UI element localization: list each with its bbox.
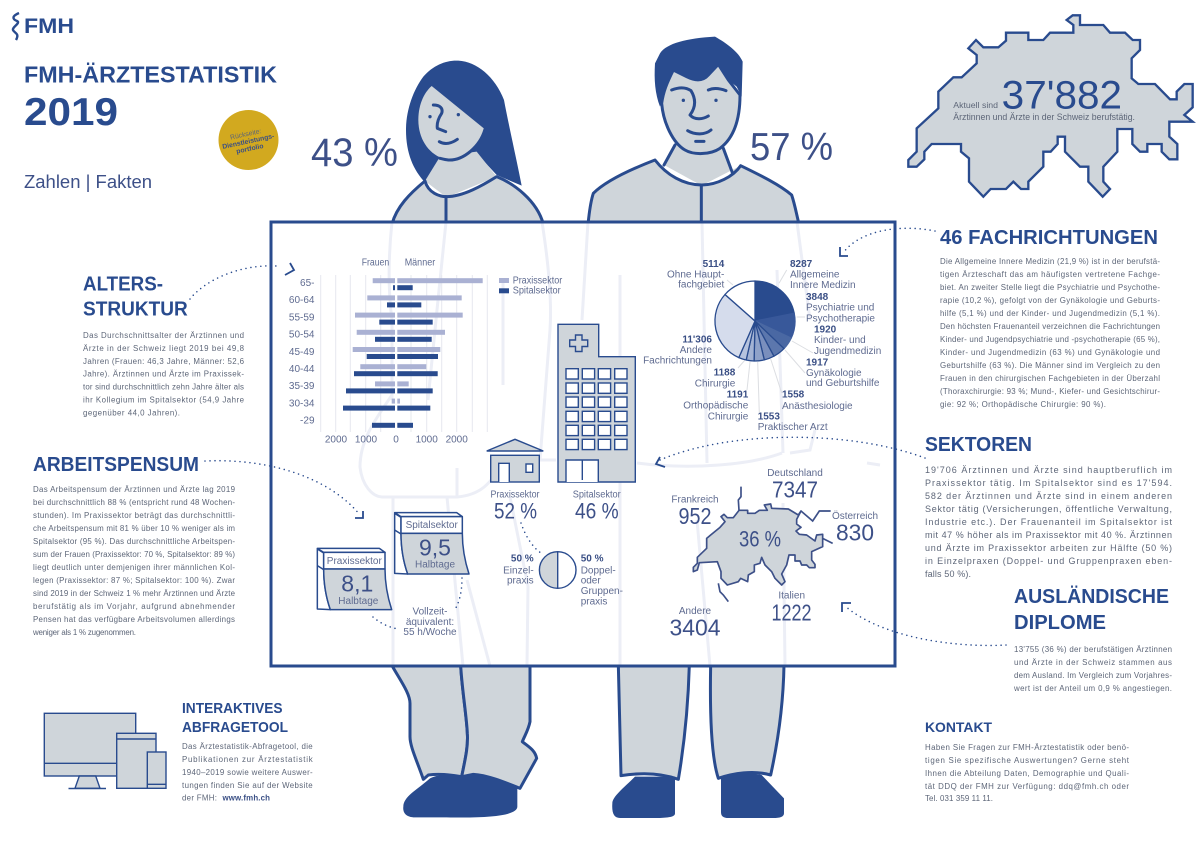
arrow: Fachrichtungen to pie	[840, 228, 935, 256]
section: Arbeitspensum: bei durchschnittlich 88 % (entspricht rund 48 Wochen-	[33, 498, 235, 507]
section: Ausländische Diplome: DIPLOME	[1014, 612, 1106, 634]
label: Spitalsektor 46 %	[573, 489, 621, 524]
section: Sektoren: und Ärzte im Praxissektor arbeiten zur Hälfte (50 %)	[925, 543, 1172, 553]
section: Ausländische Diplome: 13'755 (36 %) der berufstätigen Ärztinnen	[1014, 645, 1172, 654]
bar chart: age structure: 60-64	[289, 295, 315, 306]
bar chart: age structure: 45-49	[289, 347, 315, 358]
pie chart: specialties: Ohne Haupt-	[667, 270, 724, 280]
map: foreign diplomas: Italien	[778, 590, 805, 601]
section: Ausländische Diplome: dem Ausland. Im Vergleich zum Vorjahres-	[1014, 671, 1172, 680]
callout: Vollzeitäquivalent: äquivalent:	[406, 617, 454, 628]
pie chart: specialties: Jugendmedizin	[814, 346, 881, 357]
icon: practice house	[487, 439, 543, 482]
bar chart: age structure: Spitalsektor	[513, 286, 561, 296]
arrow: Arbeitspensum to calendars	[205, 461, 363, 518]
pie chart: specialties: Chirurgie	[695, 378, 736, 390]
section: 46 Fachrichtungen: Die Allgemeine Innere Medizin (21,9 %) ist in der berufstä-	[940, 257, 1160, 266]
bar chart: age structure: 55-59	[289, 312, 315, 323]
calendar: Praxissektor: Praxissektor	[327, 556, 382, 567]
section: Altersstruktur: Das Durchschnittsalter der Ärztinnen und	[83, 331, 244, 340]
section: Sektoren: Industrie etc.). Der Frauenanteil im Spitalsektor ist	[925, 517, 1172, 527]
pie chart: specialties: fachgebiet	[678, 280, 725, 291]
pie chart: specialties: 5114	[703, 259, 725, 270]
section: Interaktives Abfragetool	[182, 700, 313, 802]
figure: woman upper body	[392, 61, 543, 224]
pie chart: specialties: 1920	[814, 325, 837, 336]
label: Spitalsektor 46 %: 46 %	[575, 498, 619, 524]
section: Arbeitspensum	[32, 454, 236, 637]
badge: Rückseite: Dienstleistungs-	[222, 133, 275, 151]
calendar: Spitalsektor	[395, 513, 469, 574]
pie chart: specialties: 3848	[806, 292, 829, 303]
section: Ausländische Diplome	[1013, 585, 1172, 693]
section: Interaktives Abfragetool: ABFRAGETOOL	[182, 719, 288, 736]
map: Switzerland total: 37'882	[1002, 73, 1122, 117]
section: Interaktives Abfragetool: tungen finden Sie auf der Website	[182, 781, 313, 790]
section: Altersstruktur: Jahren (Frauen: 46,3 Jahre, Männer: 52,6	[83, 357, 245, 366]
bar chart: age structure: 30-34	[289, 398, 315, 409]
logo: FMH	[13, 13, 74, 40]
bar chart: age structure: 50-54	[289, 330, 315, 341]
pie chart: specialties: Gynäkologie	[806, 368, 862, 379]
subtitle: Zahlen | Fakten	[24, 172, 152, 192]
chart: practice split: 50 %	[511, 553, 534, 564]
label: Praxissektor 52 %: Praxissektor	[490, 489, 540, 500]
section: 46 Fachrichtungen: gie: 92 %; Orthopädische Chirurgie: 90 %).	[940, 400, 1106, 409]
bar chart: age structure: Praxissektor	[513, 276, 563, 286]
section: Arbeitspensum: berufstätig als im Vorjahr, aufgrund abnehmender	[33, 602, 235, 611]
map: foreign diplomas: 36 %	[739, 527, 781, 552]
section: Kontakt: tät DDQ der FMH zur Verfügung: ddq@fmh.ch oder	[925, 782, 1129, 791]
section: Kontakt: Haben Sie Fragen zur FMH-Ärztestatistik oder benö-	[925, 743, 1129, 752]
badge: Rückseite: portfolio	[236, 143, 264, 156]
section: Arbeitspensum: Spitalsektor (95 %). Das durchschnittliche Arbeitspen-	[33, 537, 235, 546]
figure: man legs and shoes	[612, 665, 784, 818]
bar chart: age structure	[289, 258, 563, 446]
section: 46 Fachrichtungen: Kinder- und Jugendmedizin (63 %) und Gynäkologie und	[940, 348, 1160, 357]
callout: Vollzeitäquivalent	[373, 578, 462, 638]
section: Kontakt: Tel. 031 359 11 11.	[925, 794, 993, 803]
icon: devices	[44, 713, 166, 788]
map: foreign diplomas: Frankreich	[671, 495, 719, 506]
map: foreign diplomas: Deutschland	[767, 468, 823, 479]
pie chart: specialties: 11'306	[682, 334, 712, 345]
logo: FMH: FMH	[24, 15, 74, 38]
section: Kontakt: tigen Sie spezifische Auswertungen? Gerne steht	[925, 756, 1130, 765]
pie chart: specialties: 8287	[790, 259, 813, 270]
calendar: Praxissektor: 8,1	[341, 571, 373, 597]
panel: central board	[271, 222, 895, 666]
calendar: Spitalsektor: Spitalsektor	[406, 520, 458, 531]
section: Kontakt	[925, 719, 1130, 803]
bar chart: age structure: 65-	[300, 278, 314, 289]
chart: practice split: oder	[581, 576, 601, 587]
section: Interaktives Abfragetool: der FMH:	[182, 794, 217, 802]
section: Sektoren: falls 50 %).	[925, 569, 971, 579]
pie chart: specialties: 1558	[782, 390, 805, 401]
section: Arbeitspensum: sum der Frauen (Praxissektor: 70 %, Spitalsektor: 89 %)	[33, 550, 235, 559]
section: 46 Fachrichtungen: biet. An zweiter Stelle liegt die Psychiatrie und Psychothe-	[940, 283, 1160, 292]
section: Interaktives Abfragetool: Publikationen zur Ärztestatistik	[182, 755, 313, 764]
chart: practice split: 50 %	[581, 553, 604, 564]
title: 2019	[24, 91, 118, 134]
section: Arbeitspensum: che Arbeitspensum mit 81 % über 10 % weniger als im	[33, 524, 235, 533]
map: foreign diplomas: 1222	[772, 600, 812, 626]
calendar: Praxissektor: Halbtage	[338, 596, 379, 607]
section: Interaktives Abfragetool: INTERAKTIVES	[182, 700, 282, 717]
chart: practice split: Einzel-	[503, 566, 534, 576]
bar chart: age structure: 0	[393, 435, 399, 446]
chart: practice split: Doppel-	[581, 566, 616, 576]
section: Arbeitspensum: Pensen hat das verfügbare Arbeitsvolumen allerdings	[33, 615, 235, 624]
calendar: Spitalsektor: 9,5	[419, 534, 451, 560]
section: Altersstruktur: STRUKTUR	[83, 299, 188, 321]
section: Altersstruktur: ALTERS-	[83, 274, 163, 296]
pie chart: specialties: 1191	[727, 390, 749, 401]
statistic: 43 % women: 43 %	[311, 131, 398, 175]
statistic: 57 % men: 57 %	[750, 126, 833, 169]
map: Switzerland total	[908, 15, 1193, 197]
section: Sektoren: 19'706 Ärztinnen und Ärzte sind hauptberuflich im	[925, 465, 1172, 475]
section: 46 Fachrichtungen: hilfe (5,1 %) und der Kinder- und Jugendmedizin (5,1 %).	[940, 309, 1160, 318]
section: Ausländische Diplome: AUSLÄNDISCHE	[1014, 585, 1169, 608]
pie chart: specialties: Allgemeine	[790, 270, 840, 280]
bar chart: age structure: 40-44	[289, 364, 315, 375]
arrow: Sektoren to buildings	[656, 437, 925, 467]
icon: hospital	[558, 324, 635, 482]
section: 46 Fachrichtungen: (Thoraxchirurgie: 93 %; Mund-, Kiefer- und Gesichtschirur-	[940, 387, 1160, 396]
section: 46 Fachrichtungen: rapie (10,2 %), gefolgt von der Gynäkologie und Geburts-	[940, 296, 1160, 305]
section: Altersstruktur: ihr Kollegium im Spitalsektor (54,9 Jahre	[83, 396, 245, 404]
section: Altersstruktur: Jahre). Ärztinnen und Ärzte im Praxissek-	[83, 370, 244, 379]
section: Ausländische Diplome: und Ärzte in der Schweiz stammen aus	[1014, 658, 1172, 667]
badge: Rückseite: Rückseite:	[230, 128, 262, 142]
section: Arbeitspensum: sind 2019 in der Schweiz 1 % mehr Ärztinnen und Ärzte	[33, 589, 236, 598]
callout: Vollzeitäquivalent: Vollzeit-	[412, 606, 448, 618]
bar chart: age structure: 1000	[416, 435, 438, 446]
section: 46 Fachrichtungen: 46 FACHRICHTUNGEN	[940, 227, 1158, 249]
label: Praxissektor 52 %: 52 %	[494, 498, 537, 524]
pie chart: specialties: und Geburtshilfe	[806, 378, 880, 389]
section: Altersstruktur: tor sind durchschnittlich zehn Jahre älter als	[83, 383, 244, 392]
bar chart: age structure: 2000	[325, 435, 348, 446]
pie chart: specialties: 1553	[758, 411, 780, 422]
section: Kontakt: Ihnen die Abteilung Daten, Demographie und Quali-	[925, 769, 1129, 778]
map: foreign diplomas	[670, 468, 878, 640]
pie chart: specialties: 1188	[714, 368, 736, 379]
section: Altersstruktur: Ärzte in der Schweiz liegt 2019 bei 49,8	[83, 344, 245, 353]
chart: practice split: Gruppen-	[581, 586, 623, 597]
map: foreign diplomas: Andere	[679, 606, 712, 617]
section: Sektoren: in Einzelpraxen (Doppel- und Gruppenpraxen eben-	[925, 556, 1172, 566]
pie chart: specialties: Fachrichtungen	[643, 356, 712, 367]
section: 46 Fachrichtungen: Geburtshilfe (63 %). Die Männer sind im Vergleich zu den	[940, 361, 1160, 370]
map: foreign diplomas: 952	[678, 503, 712, 529]
title	[24, 62, 277, 134]
arrow: Altersstruktur to chart	[190, 263, 294, 299]
pie chart: specialties: Kinder- und	[814, 335, 866, 346]
section: Sektoren: SEKTOREN	[925, 434, 1032, 456]
calendar: Spitalsektor: Halbtage	[415, 560, 455, 571]
section: Interaktives Abfragetool: 1940–2019 sowie weitere Auswer-	[182, 768, 313, 777]
figure: man upper body	[588, 37, 799, 224]
section: Ausländische Diplome: wert ist der Anteil um 0,9 % angestiegen.	[1013, 684, 1172, 693]
map: foreign diplomas: 3404	[670, 614, 721, 640]
bar chart: age structure: -29	[300, 416, 315, 427]
section: Arbeitspensum: Das Arbeitspensum der Ärztinnen und Ärzte lag 2019	[33, 485, 236, 494]
title: FMH-ÄRZTESTATISTIK	[24, 62, 277, 88]
pie chart: specialties: Praktischer Arzt	[758, 422, 828, 433]
arrow: Diplome to map	[842, 603, 1006, 645]
pie chart: specialties: Andere	[680, 345, 712, 356]
bar chart: age structure: Männer	[405, 258, 436, 269]
section: Arbeitspensum: liegt deutlich unter demjenigen ihrer männlichen Kol-	[33, 563, 235, 572]
section: 46 Fachrichtungen: Kinder- und Jugendpsychiatrie und -psychotherapie (65 %),	[940, 335, 1160, 344]
section: Sektoren: Praxissektor tätig. Im Spitalsektor sind es 17'594.	[925, 478, 1172, 488]
section: 46 Fachrichtungen: tigen Ärzteschaft das am häufigsten vertretene Fachge-	[940, 270, 1160, 279]
pie chart: specialties: Psychotherapie	[806, 314, 875, 324]
pie chart: specialties: Chirurgie	[708, 412, 749, 422]
section: Altersstruktur: gegenüber 44,0 Jahren).	[83, 408, 180, 417]
section: 46 Fachrichtungen	[940, 227, 1160, 409]
section: Arbeitspensum: legen (Praxissektor: 87 %; Spitalsektor: 100 %). Zwar	[33, 576, 235, 585]
badge: Rückseite	[218, 110, 278, 170]
chart: practice split: praxis	[507, 576, 534, 586]
section: Arbeitspensum: ARBEITSPENSUM	[33, 454, 199, 476]
section: 46 Fachrichtungen: Den höchsten Frauenanteil verzeichnen die Fachrichtungen	[940, 322, 1160, 331]
section: Interaktives Abfragetool: Das Ärztestatistik-Abfragetool, die	[182, 742, 313, 751]
section: Kontakt: KONTAKT	[925, 719, 992, 735]
section: Altersstruktur	[83, 274, 245, 417]
bar chart: age structure: Frauen	[362, 258, 389, 269]
label: Spitalsektor 46 %: Spitalsektor	[573, 489, 621, 500]
bar chart: age structure: 2000	[446, 435, 468, 446]
section: Interaktives Abfragetool: www.fmh.ch	[222, 794, 270, 802]
calendar: Praxissektor	[317, 548, 392, 610]
section: Arbeitspensum: weniger als 1 % zugenommen.	[32, 628, 136, 637]
chart: practice split	[503, 552, 623, 608]
map: Switzerland total: Ärztinnen und Ärzte in der Schweiz berufstätig.	[953, 112, 1135, 122]
label: Praxissektor 52 %	[490, 489, 540, 524]
pie chart: specialties: Psychiatrie und	[806, 302, 874, 314]
section: Sektoren: mit 47 % höher als im Praxissektor mit 40 %. Ärztinnen	[925, 530, 1172, 540]
section: Sektoren: Sektor tätig (Versicherungen, öffentliche Verwaltung,	[925, 504, 1172, 514]
connector: practice to split	[521, 523, 541, 553]
pie chart: specialties: Anästhesiologie	[782, 401, 853, 412]
map: foreign diplomas: 830	[836, 520, 874, 546]
chart: practice split: praxis	[581, 597, 607, 608]
pie chart: specialties: 1917	[806, 357, 829, 368]
pie chart: specialties: Orthopädische	[683, 400, 749, 412]
callout: Vollzeitäquivalent: 55 h/Woche	[403, 627, 457, 638]
section: 46 Fachrichtungen: Frauen in den chirurgischen Fachgebieten in der Überzahl	[940, 374, 1160, 383]
map: foreign diplomas: Österreich	[832, 510, 878, 522]
pie chart: specialties	[643, 259, 881, 433]
section: Arbeitspensum: stunden). Im Praxissektor beträgt das durchschnittli-	[33, 511, 235, 520]
map: Switzerland total: Aktuell sind	[953, 100, 998, 110]
map: foreign diplomas: 7347	[772, 477, 818, 503]
bar chart: age structure: 1000	[355, 435, 378, 446]
section: Sektoren: 582 der Ärztinnen und Ärzte sind in einem anderen	[925, 491, 1172, 501]
bar chart: age structure: 35-39	[289, 381, 315, 392]
section: Sektoren	[925, 434, 1172, 579]
pie chart: specialties: Innere Medizin	[790, 280, 856, 291]
figure: woman legs and shoes	[392, 665, 537, 818]
